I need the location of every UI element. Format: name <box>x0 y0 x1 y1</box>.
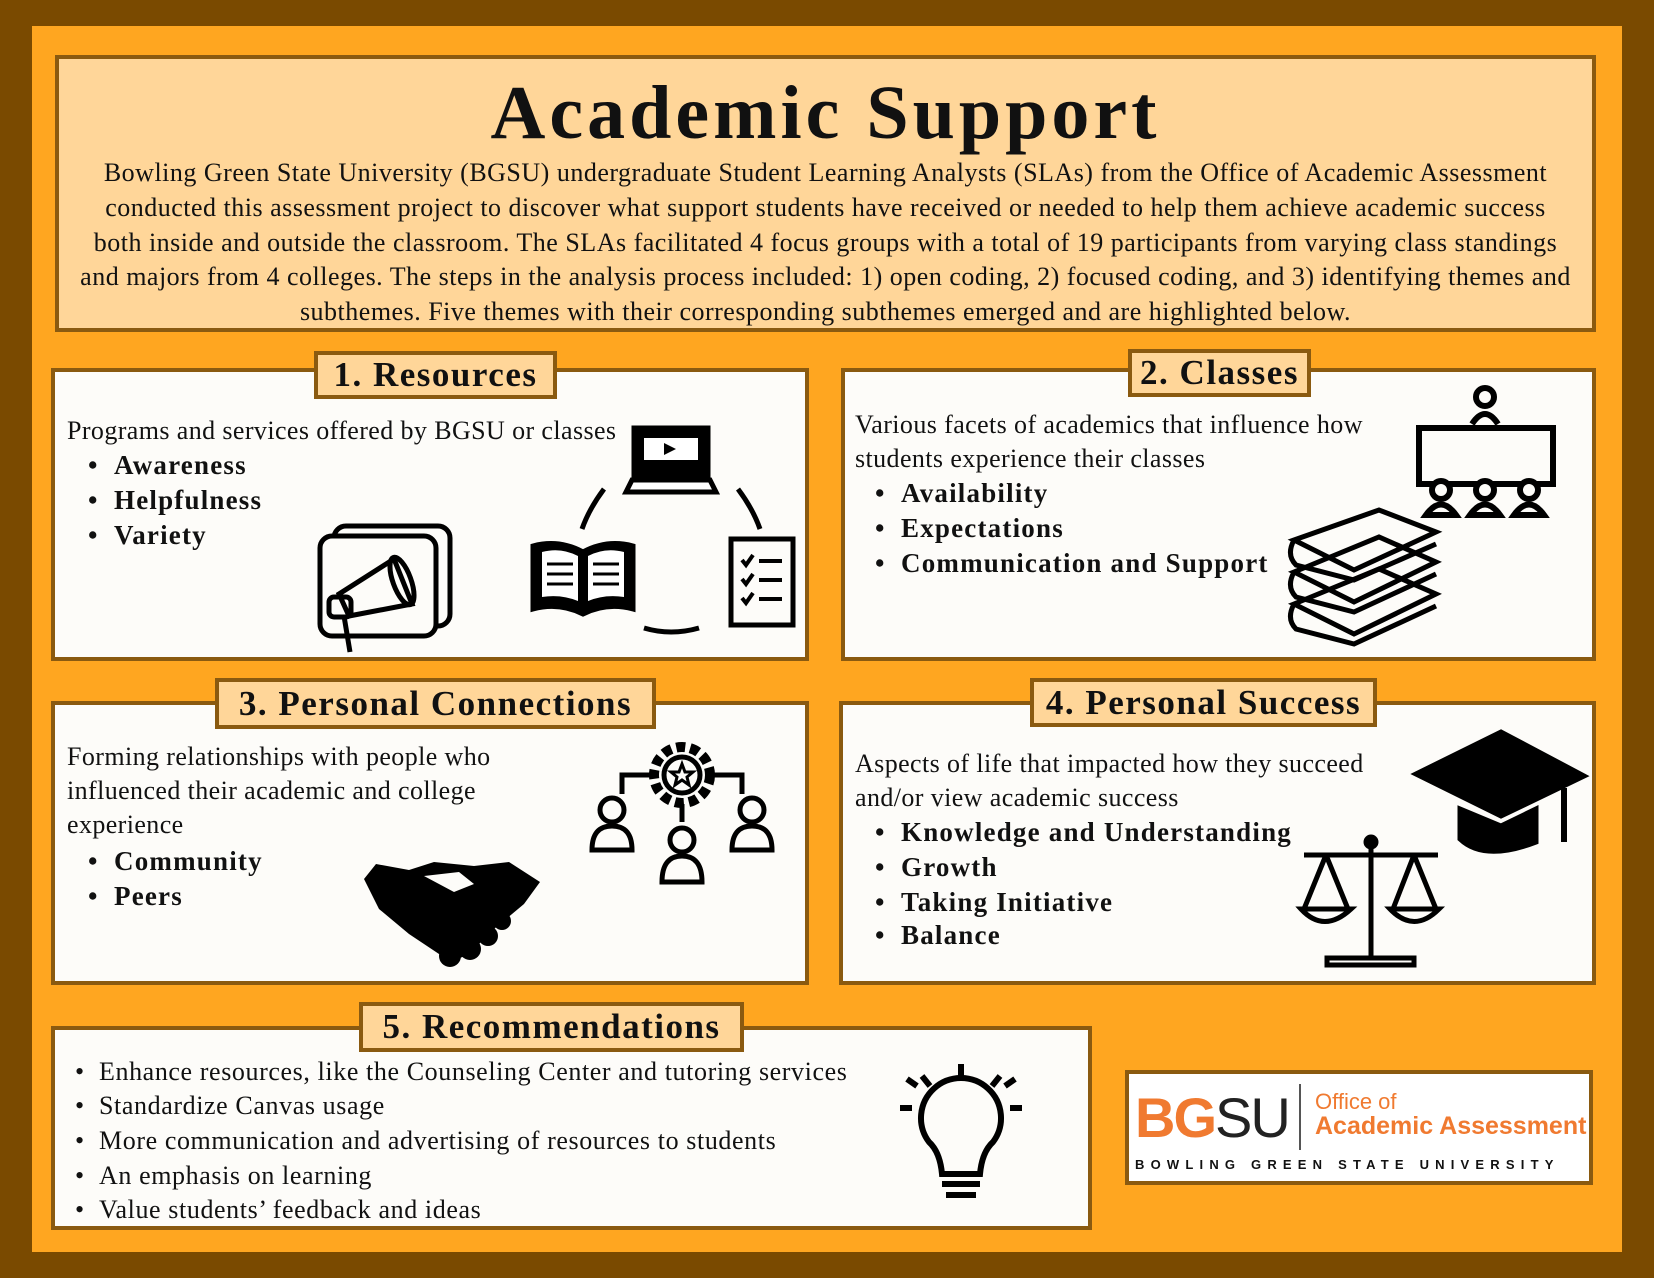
title: Academic Support <box>491 71 1160 155</box>
logo: BGSU Office of Academic Assessment <box>1125 1070 1593 1185</box>
recommendations list: An emphasis on learning <box>99 1161 372 1190</box>
logo: BGSU Office of Academic Assessment: Office of <box>1315 1089 1397 1114</box>
intro paragraph: and majors from 4 colleges. The steps in the analysis process included: 1) open coding, 2) focused coding, and 3) identifying themes and <box>80 262 1571 291</box>
description: experience <box>67 810 184 839</box>
icons: classroom and books <box>1288 385 1556 647</box>
cycle arcs <box>582 489 604 529</box>
checklist <box>731 539 793 625</box>
subthemes list: Expectations <box>901 513 1064 543</box>
megaphone card <box>320 526 450 652</box>
recommendations list <box>76 1057 847 1224</box>
logo: BGSU Office of Academic Assessment: BGSU <box>1135 1086 1289 1149</box>
tab: 5. Recommendations: 5. Recommendations <box>382 1007 721 1046</box>
subthemes list <box>876 478 1269 578</box>
subthemes list: Balance <box>901 920 1001 950</box>
header box <box>55 55 1596 332</box>
books stack <box>1290 510 1436 644</box>
subthemes list: Communication and Support <box>901 548 1269 578</box>
description: students experience their classes <box>855 444 1205 473</box>
description: Various facets of academics that influence how <box>855 410 1363 439</box>
laptop <box>626 428 716 492</box>
recommendations list: Enhance resources, like the Counseling Center and tutoring services <box>99 1057 847 1086</box>
icons: mortarboard and scales <box>1295 729 1590 968</box>
recommendations list: Value students’ feedback and ideas <box>99 1195 481 1224</box>
intro paragraph: subthemes. Five themes with their corresponding subthemes emerged and are highlighted below. <box>300 297 1351 326</box>
tab: 2. Classes: 2. Classes <box>1140 353 1299 392</box>
intro paragraph: conducted this assessment project to discover what support students have received or needed to help them achieve academic success <box>105 193 1546 222</box>
panel: classes <box>841 368 1596 661</box>
intro paragraph: both inside and outside the classroom. The SLAs facilitated 4 focus groups with a total of 19 participants from varying class standings <box>94 228 1557 257</box>
subthemes list: Taking Initiative <box>901 887 1113 917</box>
intro paragraph <box>80 158 1571 326</box>
description: Programs and services offered by BGSU or classes <box>67 416 616 445</box>
tab: 1. Resources: 1. Resources <box>334 355 538 394</box>
book <box>533 544 633 614</box>
icons: network and handshake <box>364 742 774 967</box>
description: and/or view academic success <box>855 783 1179 812</box>
mortarboard <box>1416 732 1584 851</box>
intro paragraph: Bowling Green State University (BGSU) undergraduate Student Learning Analysts (SLAs) from the Office of Academic Assessment <box>104 158 1547 187</box>
tab: 4. Personal Success: 4. Personal Success <box>1046 683 1361 722</box>
subthemes list: Awareness <box>114 450 247 480</box>
handshake <box>364 862 540 967</box>
tab: 3. Personal Connections <box>215 678 656 729</box>
panel: personal connections <box>51 701 809 985</box>
description: influenced their academic and college <box>67 776 476 805</box>
subthemes list: Community <box>114 846 263 876</box>
logo: BGSU Office of Academic Assessment: Academic Assessment <box>1315 1112 1586 1140</box>
subthemes list: Availability <box>901 478 1048 508</box>
subthemes list: Growth <box>901 852 998 882</box>
recommendations list: Standardize Canvas usage <box>99 1091 385 1120</box>
subthemes list <box>89 846 263 911</box>
panel: personal success <box>839 701 1596 985</box>
subthemes list: Knowledge and Understanding <box>901 817 1292 847</box>
description <box>67 742 491 839</box>
description: Aspects of life that impacted how they succeed <box>855 749 1364 778</box>
icon: lightbulb <box>900 1064 1022 1198</box>
panel: resources <box>51 368 809 661</box>
gear network <box>592 747 772 882</box>
subthemes list: Peers <box>114 881 183 911</box>
classroom <box>1419 388 1553 515</box>
scales <box>1301 837 1439 965</box>
description <box>855 410 1363 473</box>
logo: BGSU Office of Academic Assessment: BOWLING GREEN STATE UNIVERSITY <box>1135 1157 1560 1172</box>
subthemes list: Variety <box>114 520 207 550</box>
subthemes list <box>876 817 1292 950</box>
subthemes list: Helpfulness <box>114 485 262 515</box>
recommendations list: More communication and advertising of resources to students <box>99 1126 776 1155</box>
tab: 5. Recommendations <box>359 1002 744 1052</box>
description <box>855 749 1364 812</box>
panel: recommendations <box>51 1026 1092 1230</box>
subthemes list <box>89 450 262 550</box>
icons: resources cycle <box>318 426 796 652</box>
description: Forming relationships with people who <box>67 742 491 771</box>
tab: 3. Personal Connections: 3. Personal Connections <box>239 684 632 723</box>
tab: 1. Resources <box>314 351 557 399</box>
